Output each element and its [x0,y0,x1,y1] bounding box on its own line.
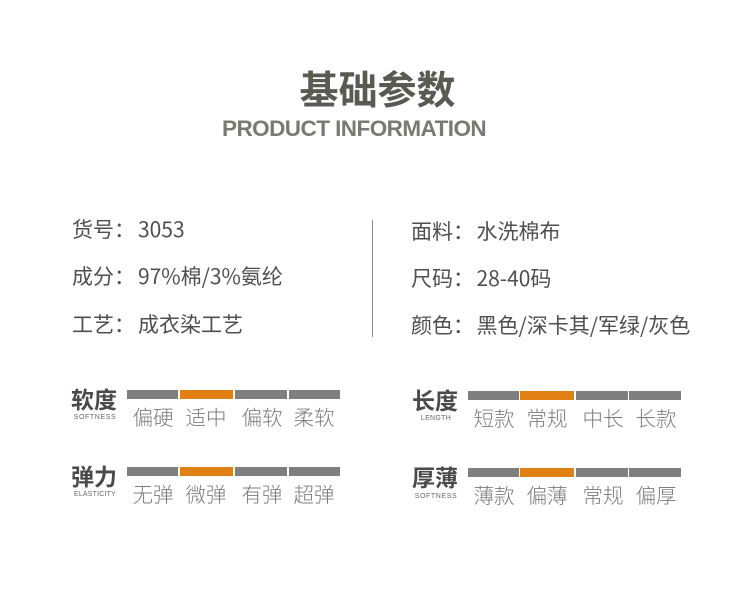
options [474,402,676,432]
spec: composition: 成分： [72,261,135,291]
bar segments [127,467,340,476]
spec: process: 工艺： [72,309,135,339]
options [132,401,334,431]
panel: thickness scale [412,459,681,509]
options: 常规 [526,402,568,432]
options: 偏软 [242,401,282,431]
panel: length scale [412,382,681,432]
options: 长款 [636,402,676,432]
bar segments [127,390,340,399]
options: 偏薄 [526,479,568,509]
spec: composition value: 97%棉/3%氨纶 [138,261,283,291]
title: 基础参数 [299,60,456,116]
spec: color: 颜色： [411,310,474,340]
subtitle: PRODUCT INFORMATION [222,116,486,141]
bar segments [468,391,681,400]
panel: elasticity scale [71,458,340,508]
panel: softness scale [71,381,340,431]
heading: elasticity: 弹力 [71,458,117,492]
spec: size: 尺码： [411,263,474,293]
spec: size value: 28-40码 [476,263,551,293]
sublabel: elasticity: ELASTICITY [74,491,116,498]
heading: thickness: 厚薄 [412,459,458,493]
options [132,478,334,508]
options: 偏硬 [132,401,174,431]
options: 微弹 [186,478,226,508]
options: 短款 [474,402,514,432]
heading: softness: 软度 [71,381,117,415]
options: 适中 [186,401,226,431]
options: 常规 [582,479,624,509]
options: 柔软 [294,401,334,431]
spec: process value: 成衣染工艺 [138,309,243,339]
sublabel: thickness: SOFTNESS [415,493,457,500]
options: 偏厚 [636,479,676,509]
options: 无弹 [132,478,174,508]
heading: length: 长度 [412,382,458,416]
options: 有弹 [242,478,282,508]
spec: item number: 货号： [72,214,135,244]
sublabel: length: LENGTH [421,415,451,422]
panel: left specifications [72,214,283,339]
options [474,479,676,509]
spec: fabric: 面料： [411,216,474,246]
bar segments [468,468,681,477]
options: 中长 [582,402,624,432]
options: 薄款 [474,479,514,509]
options: 超弹 [294,478,334,508]
spec: color value: 黑色/深卡其/军绿/灰色 [476,310,690,340]
spec: fabric value: 水洗棉布 [476,216,560,246]
sublabel: softness: SOFTNESS [74,414,116,421]
panel: right specifications [411,216,690,340]
spec: item number value: 3053 [138,214,185,244]
